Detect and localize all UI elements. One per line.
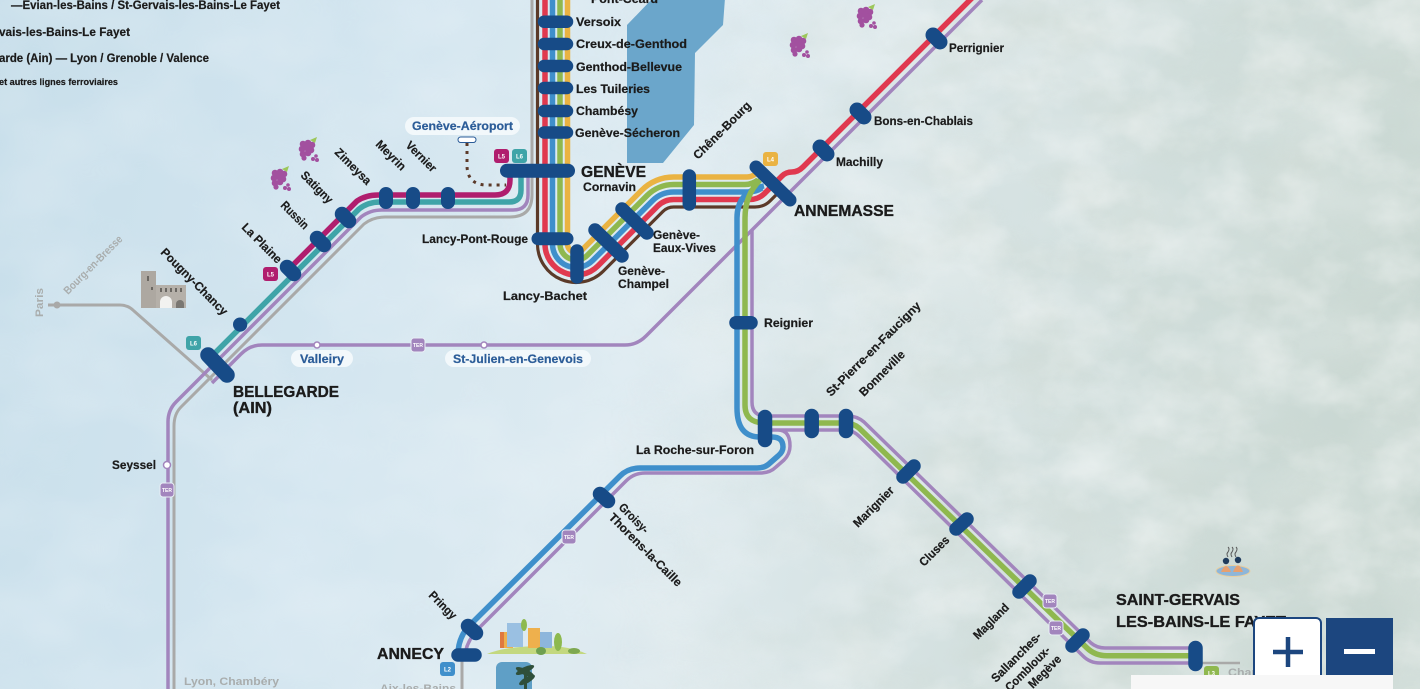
rotated station labels, descending: Vernier bbox=[403, 138, 440, 175]
legend fragments bbox=[0, 0, 280, 87]
line: airport dotted bbox=[467, 143, 506, 185]
white bottom panel bbox=[1131, 675, 1393, 689]
rotated station labels, descending: Thorens-la-Caille bbox=[606, 510, 685, 590]
rotated station labels, descending: Russin bbox=[278, 198, 312, 232]
horizontal station labels: ANNECY bbox=[377, 646, 444, 663]
rotated station labels, ascending bbox=[34, 98, 1064, 689]
line: L6 teal bbox=[212, 170, 521, 356]
rotated station labels, descending: Satigny bbox=[298, 168, 336, 207]
airport terminal icon bbox=[458, 137, 476, 142]
line badges: L2 bbox=[444, 668, 452, 674]
rotated station labels, ascending: Marignier bbox=[850, 483, 897, 530]
zoom out button bbox=[1326, 618, 1393, 678]
rotated station labels, ascending: Paris bbox=[34, 288, 46, 317]
horizontal station labels: GENÈVE bbox=[581, 162, 646, 181]
horizontal station labels: La Roche-sur-Foron bbox=[636, 443, 754, 457]
station markers bbox=[208, 22, 1196, 664]
rotated station labels, ascending: St-Pierre-en-Faucigny bbox=[823, 298, 924, 399]
line badges: L5 bbox=[267, 272, 275, 278]
line: L3 green bbox=[560, 0, 1196, 656]
horizontal station labels: Machilly bbox=[836, 155, 883, 169]
horizontal station labels: Reignier bbox=[764, 316, 813, 330]
legend fragments: vais-les-Bains-Le Fayet bbox=[0, 25, 130, 39]
horizontal station labels: SAINT-GERVAIS bbox=[1116, 592, 1240, 609]
line: L4 red bbox=[545, 0, 980, 275]
icon: grapes bbox=[790, 33, 810, 58]
rotated station labels, ascending: Magland bbox=[970, 600, 1012, 642]
horizontal station labels: Lancy-Pont-Rouge bbox=[422, 232, 528, 246]
TER badge labels bbox=[162, 343, 1061, 632]
white-dot stops bbox=[164, 342, 487, 468]
rotated station labels, ascending: Bourg-en-Bresse bbox=[62, 233, 125, 297]
other rail lines: Paris branch bbox=[48, 305, 212, 380]
TER badge labels: TER bbox=[162, 488, 172, 494]
line badges: L6 bbox=[516, 154, 524, 160]
rotated station labels, ascending: Cluses bbox=[916, 533, 952, 569]
horizontal station labels: Les Tuileries bbox=[576, 82, 650, 96]
lake: Annecy bbox=[496, 662, 532, 689]
rotated station labels, ascending: Bonneville bbox=[856, 347, 908, 399]
line: Saint-Gervais to Chamonix bbox=[1196, 662, 1240, 664]
line: TER lilac Annemasse to Bellegarde bbox=[212, 0, 982, 383]
line: lilac Geneva to Bellegarde bbox=[168, 170, 528, 689]
line badges: L5 bbox=[498, 154, 506, 160]
legend fragments: arde (Ain) — Lyon / Grenoble / Valence bbox=[0, 51, 209, 65]
TER badges bbox=[160, 338, 1063, 635]
horizontal station labels: (AIN) bbox=[233, 400, 272, 417]
icon: palm tree bbox=[515, 663, 536, 689]
horizontal station labels: Cornavin bbox=[583, 180, 636, 194]
line: L5 magenta bbox=[288, 170, 510, 270]
horizontal station labels: BELLEGARDE bbox=[233, 384, 339, 401]
icon: Paris terminal dot bbox=[54, 302, 60, 308]
horizontal station labels: Bons-en-Chablais bbox=[874, 114, 973, 128]
line: Annecy to Aix bbox=[460, 660, 464, 689]
horizontal station labels: Lyon, Chambéry bbox=[184, 676, 280, 688]
TER badge labels: TER bbox=[1051, 626, 1061, 632]
TER badge labels: TER bbox=[413, 343, 423, 349]
rotated station labels, descending: Zimeysa bbox=[332, 145, 375, 188]
TER badge labels: TER bbox=[1045, 599, 1055, 605]
line: yellow bbox=[568, 0, 757, 252]
horizontal station labels: Lancy-Bachet bbox=[503, 289, 587, 303]
line: L1 brown bbox=[538, 0, 780, 282]
rotated station labels, ascending: Sallanches- bbox=[988, 629, 1044, 685]
horizontal station labels: Genthod-Bellevue bbox=[576, 60, 682, 74]
rotated station labels, descending: Pougny-Chancy bbox=[158, 245, 231, 318]
horizontal station labels: Chambésy bbox=[576, 104, 638, 118]
horizontal station labels: Genève-Aéroport bbox=[412, 119, 513, 133]
white station pills bbox=[291, 117, 591, 367]
line: L2 blue bbox=[458, 0, 783, 655]
horizontal station labels: Genève-Sécheron bbox=[575, 126, 680, 140]
horizontal station labels: Perrignier bbox=[949, 41, 1004, 55]
zoom in button bbox=[1254, 618, 1321, 684]
lake: Léman bbox=[627, 0, 725, 163]
horizontal station labels: Champel bbox=[618, 277, 669, 291]
rotated station labels, descending: Pringy bbox=[426, 588, 460, 622]
icon: grapes bbox=[271, 166, 291, 191]
horizontal station labels: LES-BAINS-LE FAYET bbox=[1116, 614, 1286, 631]
line badges: L6 bbox=[190, 342, 198, 348]
rotated station labels, descending: Groisy- bbox=[616, 500, 652, 536]
horizontal station labels: Seyssel bbox=[112, 458, 156, 472]
horizontal station labels: Genève- bbox=[653, 228, 700, 242]
rotated station labels, descending: La Plaine bbox=[239, 220, 285, 266]
legend fragments: et autres lignes ferroviaires bbox=[0, 77, 118, 87]
line: gray Geneva to Lyon bbox=[174, 0, 532, 689]
horizontal station labels: Valleiry bbox=[300, 352, 344, 366]
line badges: L3 bbox=[1208, 672, 1216, 678]
icon: castle bbox=[141, 271, 186, 308]
icon: grapes bbox=[857, 4, 877, 29]
rotated station labels, descending: Meyrin bbox=[373, 137, 409, 173]
horizontal station labels: St-Julien-en-Genevois bbox=[453, 352, 583, 366]
horizontal station labels: Versoix bbox=[576, 15, 621, 29]
rotated station labels, descending bbox=[158, 137, 685, 622]
icon: Annecy town bbox=[487, 619, 587, 655]
rotated station labels, ascending: Chêne-Bourg bbox=[690, 98, 754, 162]
horizontal station labels: Chamonix bbox=[1228, 667, 1289, 679]
icon: thermal bath bbox=[1216, 547, 1250, 576]
TER badge labels: TER bbox=[564, 535, 574, 541]
horizontal station labels: Creux-de-Genthod bbox=[576, 37, 687, 51]
horizontal station labels: Genève- bbox=[618, 264, 665, 278]
line badges: L4 bbox=[767, 158, 775, 164]
line: TER lilac through Saint-Gervais bbox=[465, 230, 1196, 663]
horizontal station labels: Eaux-Vives bbox=[653, 241, 716, 255]
line badges bbox=[186, 149, 1219, 680]
horizontal station labels: ANNEMASSE bbox=[794, 203, 894, 220]
icon: grapes bbox=[299, 137, 319, 162]
